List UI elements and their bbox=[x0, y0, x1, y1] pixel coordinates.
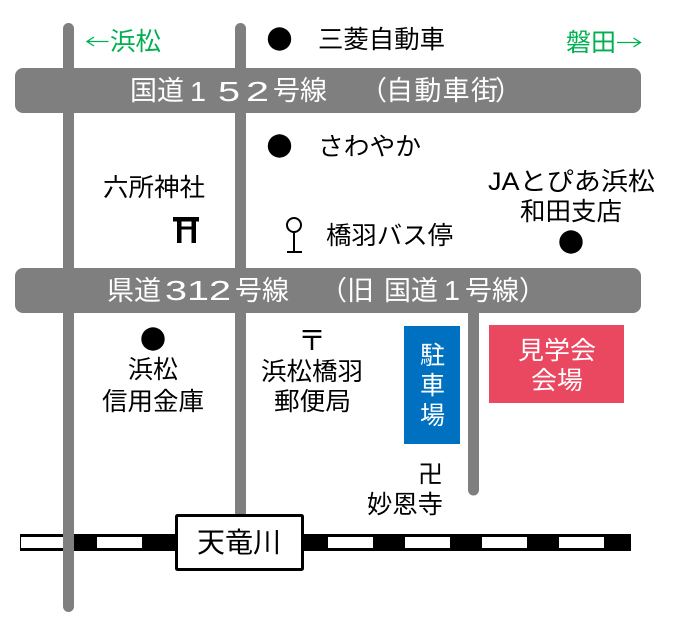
landmark: Myoonji temple: 卍 bbox=[418, 461, 443, 489]
landmark: Hamamatsu Hashiba post office: 郵便局 bbox=[274, 388, 351, 416]
road: prefectural route 312 bbox=[15, 268, 641, 313]
station: Tenryugawa bbox=[176, 516, 302, 570]
road: national route 152: 1 bbox=[190, 76, 206, 107]
landmark: JA Topia Hamamatsu Wada branch: JAとぴあ浜松 bbox=[488, 168, 655, 196]
landmark: Hamamatsu Hashiba post office bbox=[261, 325, 363, 416]
road: prefectural route 312: 1 bbox=[444, 275, 460, 306]
road: national route 152: ） bbox=[495, 76, 522, 106]
landmark: Sawayaka bbox=[268, 133, 421, 161]
direction label: Hamamatsu: 浜松 bbox=[110, 28, 161, 56]
icon: torii gate bbox=[173, 217, 199, 243]
label: tour venue bbox=[489, 325, 624, 403]
landmark: Hamamatsu Shinkin Bank: 信用金庫 bbox=[102, 388, 204, 416]
station: Tenryugawa: 天竜川 bbox=[197, 527, 281, 558]
vertical road: right bbox=[468, 300, 479, 496]
road: prefectural route 312: 県道 bbox=[107, 276, 161, 306]
road: national route 152: 号線 bbox=[273, 76, 327, 106]
landmark: Hashiba bus stop bbox=[287, 218, 453, 252]
landmark: Hamamatsu Hashiba post office: 〒 bbox=[298, 325, 326, 356]
landmark: Mitsubishi Motors: 三菱自動車 bbox=[318, 26, 445, 54]
direction label: Hamamatsu bbox=[87, 28, 161, 56]
landmark: Myoonji temple: 妙恩寺 bbox=[367, 491, 443, 519]
icon: bus stop bbox=[287, 218, 302, 252]
label: parking bbox=[404, 326, 460, 444]
label: parking: 場 bbox=[420, 402, 445, 430]
road: prefectural route 312: 国道 bbox=[384, 276, 438, 306]
landmark: Rokusho shrine bbox=[103, 174, 205, 243]
direction label: Iwata bbox=[566, 29, 640, 57]
landmark: Myoonji temple bbox=[367, 461, 443, 519]
landmark: Rokusho shrine: 六所神社 bbox=[103, 174, 205, 202]
road: national route 152 bbox=[15, 68, 641, 113]
road: national route 152: （ bbox=[360, 76, 387, 106]
landmark: Hamamatsu Shinkin Bank bbox=[102, 327, 204, 416]
landmark: Sawayaka: さわやか bbox=[318, 133, 421, 161]
road: prefectural route 312: 号線 bbox=[465, 276, 519, 306]
road: national route 152: 5 bbox=[218, 76, 240, 107]
label: parking: 車 bbox=[420, 372, 445, 400]
landmark: JA Topia Hamamatsu Wada branch bbox=[488, 168, 655, 254]
vertical road: centre bbox=[235, 23, 246, 518]
direction label: Iwata: 磐田 bbox=[566, 29, 616, 57]
road: prefectural route 312: 旧 bbox=[347, 276, 374, 306]
road: national route 152: 2 bbox=[246, 76, 269, 107]
label: parking: 駐 bbox=[420, 342, 445, 370]
label: tour venue: 会場 bbox=[531, 367, 583, 395]
road: prefectural route 312: 号線 bbox=[235, 276, 289, 306]
road: prefectural route 312: ） bbox=[519, 276, 546, 306]
road: national route 152: 自動車街 bbox=[386, 76, 498, 106]
road: national route 152: 国道 bbox=[130, 76, 184, 106]
icon: left arrow bbox=[87, 37, 108, 46]
landmark: Hamamatsu Hashiba post office: 浜松橋羽 bbox=[261, 358, 363, 386]
icon: right arrow bbox=[617, 38, 640, 47]
landmark: JA Topia Hamamatsu Wada branch: 和田支店 bbox=[520, 198, 622, 226]
vertical road: left bbox=[63, 23, 74, 612]
railway line bbox=[20, 534, 631, 551]
landmark: Hashiba bus stop: 橋羽バス停 bbox=[326, 222, 453, 250]
road: prefectural route 312: 312 bbox=[165, 275, 231, 306]
road: prefectural route 312: （ bbox=[320, 276, 347, 306]
label: tour venue: 見学会 bbox=[518, 337, 596, 365]
landmark: Hamamatsu Shinkin Bank: 浜松 bbox=[128, 356, 178, 384]
